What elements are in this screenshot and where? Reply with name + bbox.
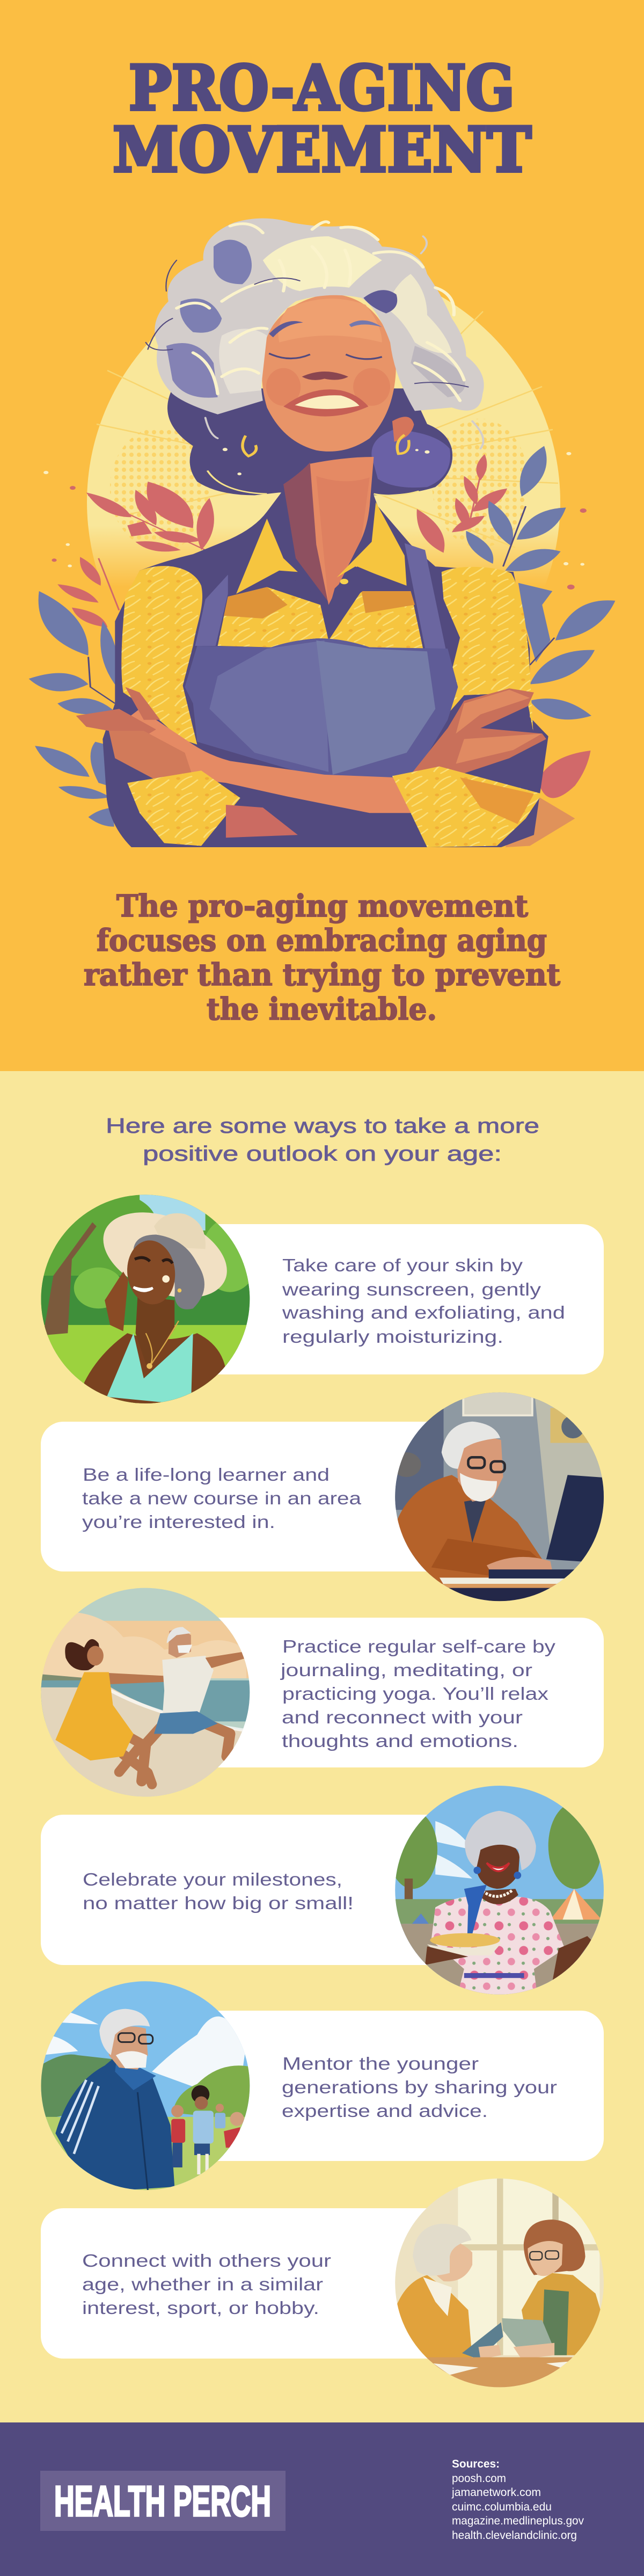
card 1 text xyxy=(282,1255,565,1347)
card 3 text: thoughts and emotions. xyxy=(282,1731,518,1751)
intro statement: focuses on embracing aging xyxy=(97,923,547,958)
sources list: cuimc.columbia.edu xyxy=(452,2501,552,2513)
section heading: Here are some ways to take a more xyxy=(106,1115,539,1138)
arms and hands xyxy=(76,687,546,813)
card 6 text: Connect with others your xyxy=(82,2251,331,2271)
tip 5: mentor xyxy=(37,1977,604,2195)
card 3 text: practicing yoga. You’ll relax xyxy=(282,1684,549,1704)
sources list: Sources: xyxy=(452,2458,500,2470)
card 2 text xyxy=(82,1465,362,1532)
intro statement: the inevitable. xyxy=(207,992,437,1027)
shirt cuffs xyxy=(127,767,542,847)
card 6 text: interest, sport, or hobby. xyxy=(82,2298,319,2318)
card 3 xyxy=(161,1618,604,1767)
shirt front and sleeves xyxy=(121,502,533,745)
card 3 text: and reconnect with your xyxy=(282,1707,523,1727)
hair: dark lower curls xyxy=(167,388,452,496)
card 5 text: expertise and advice. xyxy=(282,2101,488,2121)
card 2 text: take a new course in an area xyxy=(82,1488,362,1508)
illustration: smiling older woman with crossed arms xyxy=(29,219,615,847)
tip 3: self-care xyxy=(37,1584,604,1806)
card 3 text: journaling, meditating, or xyxy=(280,1660,532,1680)
photo: woman holding a pie at a fair xyxy=(395,1786,604,1995)
card 5 text xyxy=(282,2054,557,2121)
title: PRO-AGING xyxy=(129,52,515,124)
photo: couple doing yoga on the beach xyxy=(37,1584,254,1806)
tip 4: milestones xyxy=(41,1780,608,2002)
photo: older man working at a computer xyxy=(390,1387,608,1604)
card 5 text: generations by sharing your xyxy=(282,2077,557,2097)
card 1 text: regularly moisturizing. xyxy=(282,1327,503,1347)
panel: yellow header background xyxy=(0,0,644,1071)
logo: Health Perch xyxy=(40,2471,286,2531)
intro statement: The pro-aging movement xyxy=(116,889,528,924)
body: dark silhouette, shirt and apron xyxy=(76,457,548,847)
card 1 xyxy=(161,1224,604,1374)
card 2 text: Be a life-long learner and xyxy=(83,1465,330,1485)
card 1 text: Take care of your skin by xyxy=(282,1255,523,1275)
title: MOVEMENT xyxy=(113,114,531,186)
sources list: health.clevelandclinic.org xyxy=(452,2529,577,2542)
card 3 text xyxy=(280,1636,556,1751)
sources list: jamanetwork.com xyxy=(451,2486,541,2499)
card 4 text: Celebrate your milestones, xyxy=(83,1869,342,1889)
photo: two women reading books at a table xyxy=(390,2174,608,2392)
photo: older man coaching kids on a field xyxy=(37,1977,254,2195)
card 6 xyxy=(41,2208,459,2359)
section heading xyxy=(106,1115,539,1166)
sun circle with rays and halftone xyxy=(87,295,560,581)
card 2 xyxy=(41,1422,459,1571)
sources list xyxy=(451,2458,584,2542)
card 6 text xyxy=(82,2251,331,2318)
tip 1: skin care xyxy=(33,1189,604,1411)
card 3 text: Practice regular self-care by xyxy=(282,1636,556,1656)
panel: pale yellow tips background xyxy=(0,1071,644,2422)
intro statement: rather than trying to prevent xyxy=(84,957,560,993)
panel: purple footer background xyxy=(0,2422,644,2576)
card 4 text: no matter how big or small! xyxy=(83,1893,354,1913)
tip 2: life-long learner xyxy=(41,1387,608,1604)
section heading: positive outlook on your age: xyxy=(143,1143,502,1166)
neck xyxy=(283,457,374,605)
card 5 text: Mentor the younger xyxy=(282,2054,479,2073)
tip 6: connect xyxy=(41,2174,608,2392)
hair: white and lavender curls xyxy=(146,219,484,449)
card 6 text: age, whether in a similar xyxy=(82,2274,323,2294)
card 1 text: wearing sunscreen, gently xyxy=(282,1279,541,1299)
apron xyxy=(185,543,458,783)
foliage: pink and blue leaves xyxy=(29,446,615,847)
face xyxy=(243,294,414,456)
sources list: poosh.com xyxy=(452,2472,506,2485)
card 2 text: you’re interested in. xyxy=(82,1512,275,1532)
intro statement xyxy=(84,889,560,1027)
title xyxy=(113,52,531,186)
sources list: magazine.medlineplus.gov xyxy=(452,2515,584,2527)
card 4 xyxy=(41,1815,459,1965)
card 1 text: washing and exfoliating, and xyxy=(282,1302,565,1322)
card 5 xyxy=(161,2011,604,2161)
photo: woman applying sunscreen in a park xyxy=(41,1195,250,1403)
card 4 text xyxy=(83,1869,354,1913)
logo: Health Perch: HEALTH PERCH xyxy=(54,2477,271,2525)
